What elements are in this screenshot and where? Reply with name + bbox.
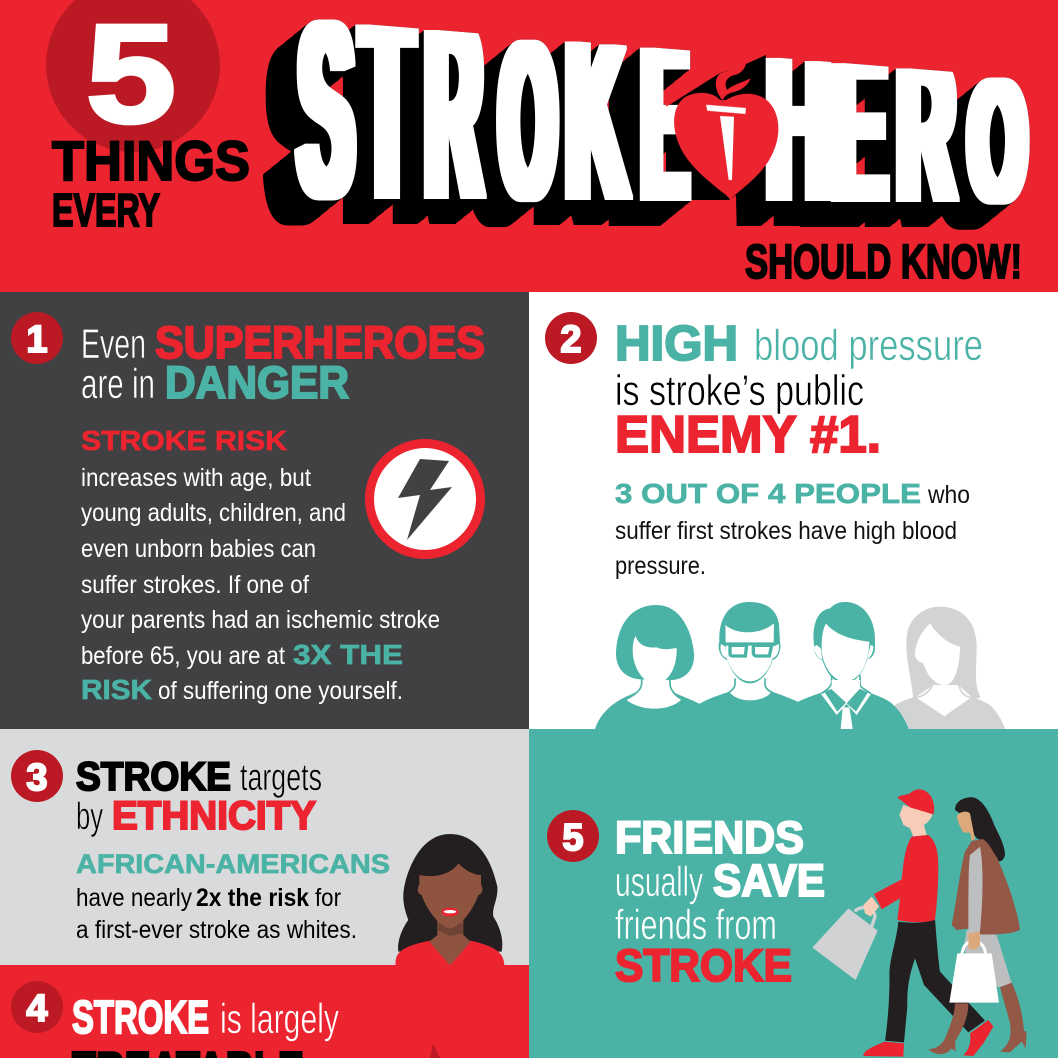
body text: have nearly — [76, 884, 192, 912]
heading — [615, 317, 983, 464]
number 4 — [11, 981, 63, 1033]
shadow fill between E and H — [666, 55, 766, 200]
heading: friends from — [615, 901, 777, 948]
heading: by — [76, 796, 103, 838]
illustration: walking friends — [812, 789, 1027, 1057]
title: STROKE HERO: H — [767, 1, 830, 246]
heading: is stroke’s public — [615, 367, 864, 415]
body text: increases with age, but — [81, 464, 311, 492]
body text — [76, 849, 390, 944]
title: STROKE HERO: E — [642, 0, 687, 248]
number 2 — [545, 312, 597, 364]
title: STROKE HERO: O — [969, 44, 1026, 239]
grey woman — [895, 607, 1005, 729]
man — [812, 789, 993, 1057]
number 2: 2 — [560, 319, 582, 361]
heading: ETHNICITY — [112, 794, 316, 838]
heading: SUPERHEROES — [155, 317, 485, 368]
woman's boot and shopping bag — [928, 932, 999, 1054]
heading: usually — [615, 858, 703, 905]
THINGS: THINGS — [52, 129, 250, 192]
heading: blood pressure — [754, 321, 983, 370]
heading — [615, 812, 825, 991]
body text: STROKE RISK — [81, 425, 287, 456]
title: STROKE HERO: E — [832, 10, 886, 246]
body text: young adults, children, and — [81, 499, 346, 527]
heading: Even — [81, 320, 146, 367]
body text: a first-ever stroke as whites. — [76, 916, 357, 944]
number 5 — [547, 810, 599, 862]
heading: DANGER — [165, 357, 349, 408]
icon: heart with torch — [666, 58, 778, 226]
body text: suffer strokes. If one of — [81, 571, 309, 599]
heading: is largely — [220, 995, 339, 1042]
body text: even unborn babies can — [81, 535, 316, 563]
title: STROKE HERO: O — [500, 0, 556, 247]
man with tie — [797, 602, 909, 729]
man with glasses — [697, 602, 803, 729]
body text: 3 OUT OF 4 PEOPLE — [615, 478, 921, 509]
number 1: 1 — [26, 319, 48, 361]
header: 5 things every — [46, 0, 250, 236]
body text: RISK — [81, 674, 152, 705]
woman — [952, 797, 1027, 1052]
body text — [615, 478, 970, 580]
panel 3: ethnicity — [0, 729, 529, 965]
title: STROKE HERO: R — [898, 18, 954, 243]
heading: STROKE — [76, 755, 231, 799]
body text: 2x the risk — [196, 884, 309, 912]
number 3: 3 — [26, 757, 48, 799]
number 4: 4 — [26, 988, 48, 1030]
header band — [0, 0, 1058, 292]
body text: of suffering one yourself. — [158, 677, 403, 705]
body text: your parents had an ischemic stroke — [81, 606, 440, 634]
heading: HIGH — [615, 317, 738, 371]
body text: pressure. — [615, 552, 706, 580]
number 1 — [11, 312, 63, 364]
body text: before 65, you are at — [81, 642, 285, 670]
heading: FRIENDS — [615, 812, 804, 863]
woman with bob — [595, 605, 705, 729]
body text: 3X THE — [293, 639, 403, 670]
panel 1: superheroes — [0, 292, 529, 729]
illustration tip — [430, 1044, 440, 1058]
body text: for — [315, 884, 341, 912]
title: STROKE HERO — [263, 20, 1030, 230]
heading: STROKE — [615, 940, 792, 991]
panel 4: treatable — [0, 965, 529, 1058]
number 3 — [11, 750, 63, 802]
heading: are in — [81, 360, 155, 407]
heading: STROKE — [72, 991, 209, 1043]
body text: who — [927, 481, 970, 509]
number 5: 5 — [562, 817, 584, 859]
heading — [81, 317, 485, 408]
circle behind 5 — [46, 0, 220, 152]
body text — [81, 425, 440, 705]
illustration: woman — [396, 834, 504, 965]
body text: suffer first strokes have high blood — [615, 517, 957, 545]
panel 2: high blood pressure — [529, 292, 1058, 729]
EVERY: EVERY — [52, 184, 160, 236]
heading — [76, 755, 322, 838]
icon: lightning bolt — [365, 439, 485, 559]
body text: AFRICAN-AMERICANS — [76, 849, 390, 879]
icon: four people silhouettes — [595, 602, 1005, 729]
heading: targets — [240, 757, 322, 799]
panel 5: friends — [529, 729, 1058, 1058]
heading: ENEMY #1. — [615, 406, 881, 464]
heading — [72, 991, 339, 1058]
heading: SAVE — [713, 855, 825, 906]
